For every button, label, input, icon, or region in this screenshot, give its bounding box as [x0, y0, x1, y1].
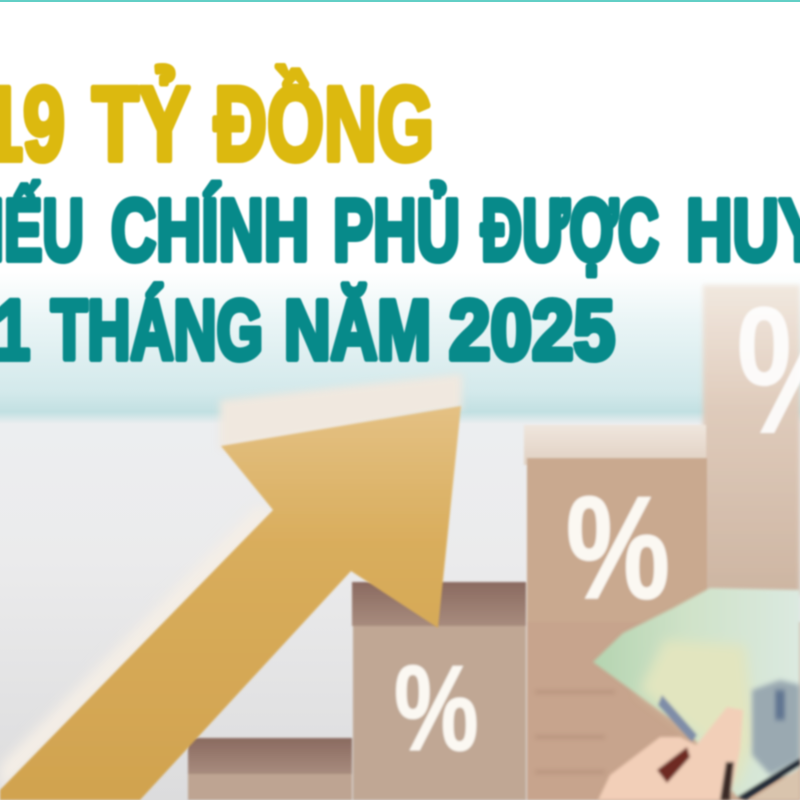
- title line 2: [0, 182, 800, 279]
- title line 3: [0, 283, 615, 377]
- money and hand: [593, 588, 800, 800]
- lower right corner: [750, 768, 800, 800]
- top accent line: [0, 0, 800, 2]
- hand: [598, 707, 743, 800]
- title line 1: [0, 65, 434, 183]
- first block: [188, 738, 352, 800]
- title line 3: THÁNG: [51, 283, 263, 377]
- title line 2: CHÍNH: [111, 182, 309, 279]
- second block front: [353, 626, 526, 800]
- second block front: %: [394, 641, 479, 777]
- banknotes yellow tint: [640, 640, 755, 790]
- banknotes edge: [658, 695, 697, 742]
- title line 2: ĐƯỢC: [481, 182, 659, 279]
- tall block at right: [703, 268, 800, 595]
- arrow highlight: [220, 374, 462, 450]
- middle block front: %: [566, 467, 670, 630]
- middle block front: [527, 458, 707, 630]
- arrow body: [0, 406, 461, 800]
- title line 3: 2025: [449, 283, 615, 377]
- title: [0, 65, 800, 377]
- title line 1: ĐỒNG: [214, 65, 434, 183]
- boxes: percent blocks: [188, 268, 800, 800]
- banknotes dark: [752, 680, 800, 775]
- hand shadow: [657, 747, 690, 783]
- title line 3: NĂM: [284, 283, 431, 377]
- second block top: [352, 582, 526, 626]
- banknotes: [593, 588, 800, 797]
- lower middle block: [527, 622, 800, 800]
- middle block top: [524, 425, 706, 465]
- title line 1: TỶ: [92, 65, 190, 183]
- title line 2: PHỦ: [333, 182, 460, 279]
- arrow: [0, 374, 462, 800]
